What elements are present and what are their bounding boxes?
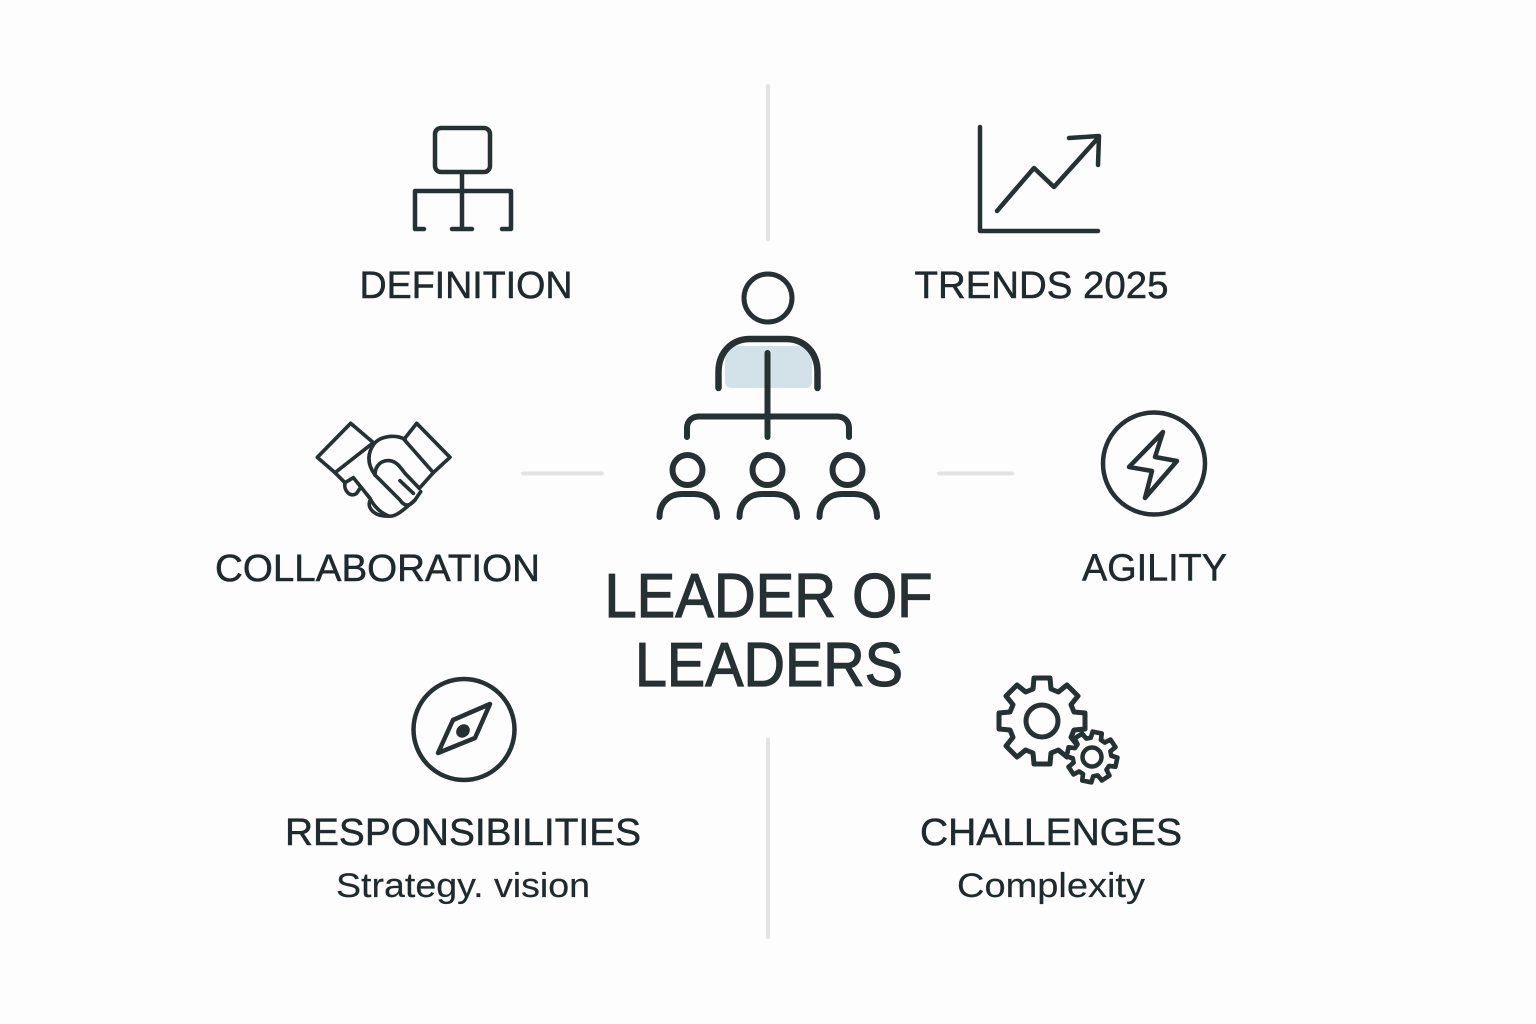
icon: handshake — [317, 423, 450, 516]
icon: org chart — [415, 128, 511, 229]
label: definition: DEFINITION — [360, 265, 572, 307]
icon: lightning bolt in circle — [1103, 412, 1205, 514]
label: agility: AGILITY — [1082, 548, 1227, 590]
label: challenges: CHALLENGES — [920, 812, 1182, 854]
icon: rising line chart — [980, 127, 1099, 231]
central title — [604, 562, 932, 700]
icon: gears — [999, 678, 1122, 787]
central title: LEADERS — [635, 631, 903, 700]
panel: trends 2025 — [914, 127, 1168, 307]
icon: compass — [414, 679, 514, 780]
central title: LEADER OF — [604, 562, 932, 631]
label: trends 2025: TRENDS 2025 — [914, 265, 1168, 307]
panel: agility — [1082, 412, 1227, 590]
panel: challenges — [920, 678, 1182, 905]
panel: collaboration — [215, 423, 540, 590]
subtext: strategy, vision: Strategy. vision — [336, 867, 590, 905]
central icon: leader with team hierarchy — [660, 274, 877, 517]
panel: definition — [360, 128, 572, 307]
label: collaboration: COLLABORATION — [215, 548, 540, 590]
panel: responsibilities — [285, 679, 641, 905]
subtext: complexity: Complexity — [957, 867, 1145, 905]
label: responsibilities: RESPONSIBILITIES — [285, 812, 641, 854]
